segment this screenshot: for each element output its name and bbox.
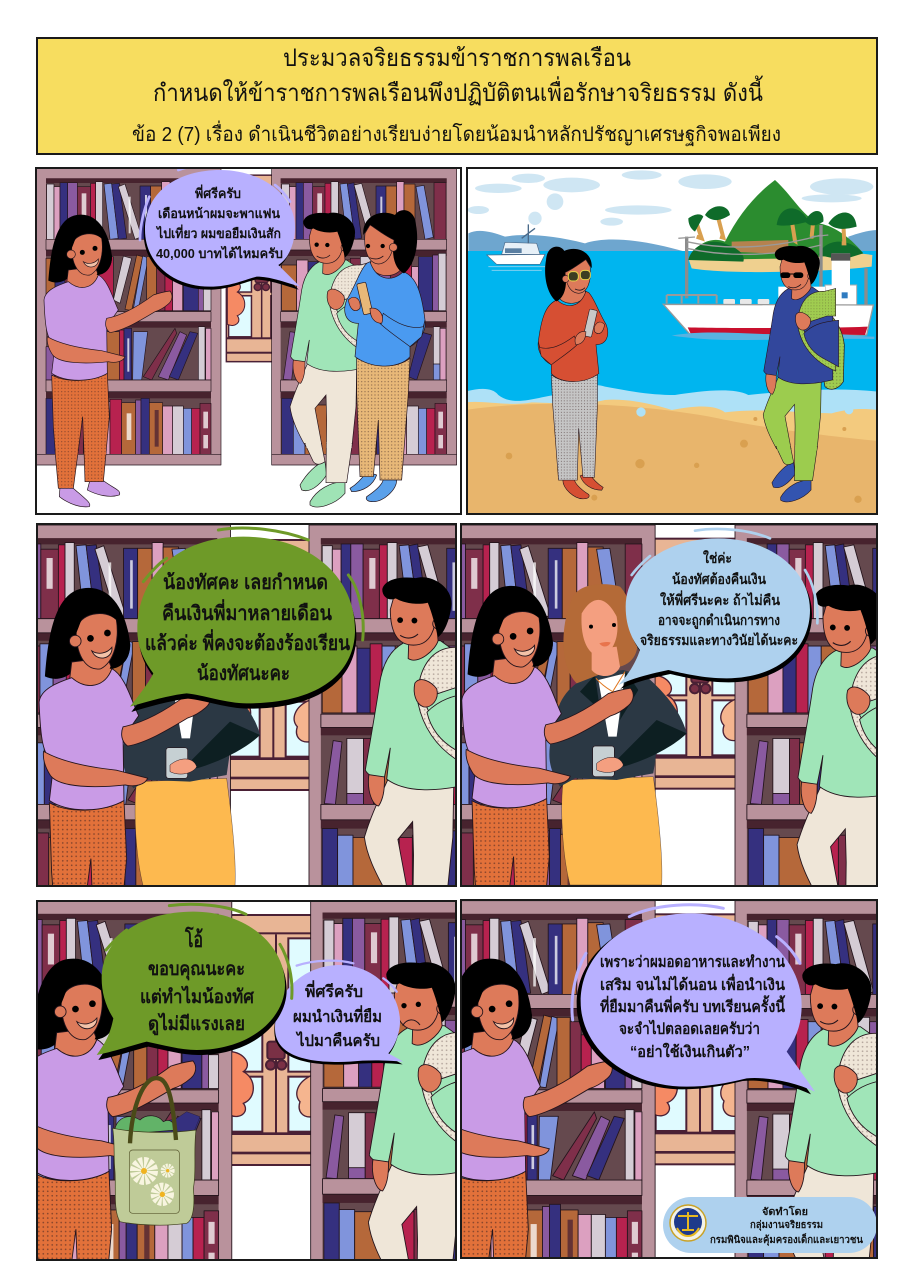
speech bubble text: panel 4: จริยธรรมและทางวินัยได้นะคะ <box>640 631 798 648</box>
panel 1: asking to borrow money <box>36 164 461 514</box>
speech bubble text: panel 5 right: พี่ศรีครับ <box>305 980 363 1001</box>
speech bubble text: panel 3: คืนเงินพี่มาหลายเดือน <box>162 598 332 625</box>
speech bubble text: panel 6: เสริม จนไม่ได้นอน เพื่อนำเงิน <box>600 973 785 994</box>
speech bubble text: panel 6: “อย่าใช้เงินเกินตัว” <box>630 1042 750 1061</box>
speech bubble text: panel 1 <box>155 184 283 261</box>
speech bubble text: panel 4 <box>640 549 798 648</box>
speech bubble text: panel 4: น้องทัศต้องคืนเงิน <box>672 571 766 587</box>
clouds <box>468 170 873 226</box>
credit badge: กรมพินิจและคุ้มครองเด็กและเยาวชน <box>710 1232 863 1246</box>
distant hills <box>468 231 685 252</box>
speech bubble text: panel 4: ให้พี่ศรีนะคะ ถ้าไม่คืน <box>660 590 780 608</box>
speech bubble text: panel 1: ไปเที่ยว ผมขอยืมเงินสัก <box>155 224 281 241</box>
speech bubble text: panel 3: น้องทัศนะคะ <box>197 662 290 685</box>
speech bubble text: panel 6: จะจำไปตลอดเลยครับว่า <box>619 1019 760 1038</box>
title banner: กำหนดให้ข้าราชการพลเรือนพึงปฏิบัติตนเพื่อรักษาจริยธรรม ดังนี้ <box>153 75 763 107</box>
bag of money <box>113 1078 200 1225</box>
speech bubble text: panel 6 <box>600 953 785 1061</box>
speech bubble text: panel 4: อาจจะถูกดำเนินการทาง <box>658 612 780 629</box>
shore and sand <box>468 385 876 414</box>
small boat <box>487 224 545 270</box>
speech bubble text: panel 1: 40,000 บาทได้ไหมครับ <box>156 245 283 261</box>
speech bubble text: panel 3 <box>145 571 350 685</box>
green bubble <box>98 966 287 1060</box>
speech bubble text: panel 6: ที่ยืมมาคืนพี่ครับ บทเรียนครั้งนี้ <box>600 995 785 1016</box>
speech bubble text: panel 4: ใช่ค่ะ <box>703 549 732 566</box>
speech bubble text: panel 1: เดือนหน้าผมจะพาแฟน <box>158 206 280 221</box>
panel 4: colleague warns about discipline <box>462 525 876 885</box>
speech bubble text: panel 5 left <box>140 926 255 1036</box>
sea <box>465 251 878 404</box>
panel 5: returning the money in a bag <box>38 902 455 1259</box>
speech bubble text: panel 3: แล้วค่ะ พี่คงจะต้องร้องเรียน <box>145 628 350 655</box>
speech bubble text: panel 1: พี่ศรีครับ <box>195 184 241 201</box>
speech bubble text: panel 5 left: ขอบคุณนะคะ <box>148 959 245 981</box>
panel 6: lesson learned <box>462 901 876 1257</box>
title banner <box>37 38 877 154</box>
speech bubble text: panel 5 left: ดูไม่มีแรงเลย <box>148 1012 245 1036</box>
woman with brown hair and jacket <box>549 584 687 885</box>
small lilac bubble <box>274 1022 402 1065</box>
speech bubble text: panel 3: น้องทัศคะ เลยกำหนด <box>163 571 328 594</box>
credit badge: จัดทำโดย <box>762 1205 808 1218</box>
title banner: ประมวลจริยธรรมข้าราชการพลเรือน <box>283 45 631 72</box>
logo: justice department emblem <box>670 1205 706 1241</box>
speech bubble text: panel 5 right <box>293 980 382 1050</box>
panel 3: woman in lilac replies <box>38 525 455 885</box>
speech bubble text: panel 5 left: โอ้ <box>184 926 203 952</box>
credit badge: กลุ่มงานจริยธรรม <box>750 1219 823 1231</box>
speech bubble text: panel 6: เพราะว่าผมอดอาหารและทำงาน <box>600 953 785 971</box>
speech bubble text: panel 5 right: ผมนำเงินที่ยืม <box>293 1005 382 1026</box>
character: woman in red top with sunglasses and phone <box>538 247 608 499</box>
woman with coffee cup <box>124 700 260 885</box>
character: man in navy hoodie with sunglasses <box>763 246 844 502</box>
speech bubble text: panel 5 left: แต่ทำไมน้องทัศ <box>140 985 255 1008</box>
big ship <box>663 225 874 340</box>
credit badge <box>663 1197 877 1253</box>
panel 2: beach holiday scene <box>465 168 878 515</box>
speech bubble text: panel 5 right: ไปมาคืนครับ <box>295 1031 380 1050</box>
title banner: ข้อ 2 (7) เรื่อง ดำเนินชีวิตอย่างเรียบง่ายโดยน้อมนำหลักปรัชญาเศรษฐกิจพอเพียง <box>132 120 781 146</box>
island <box>688 180 872 272</box>
